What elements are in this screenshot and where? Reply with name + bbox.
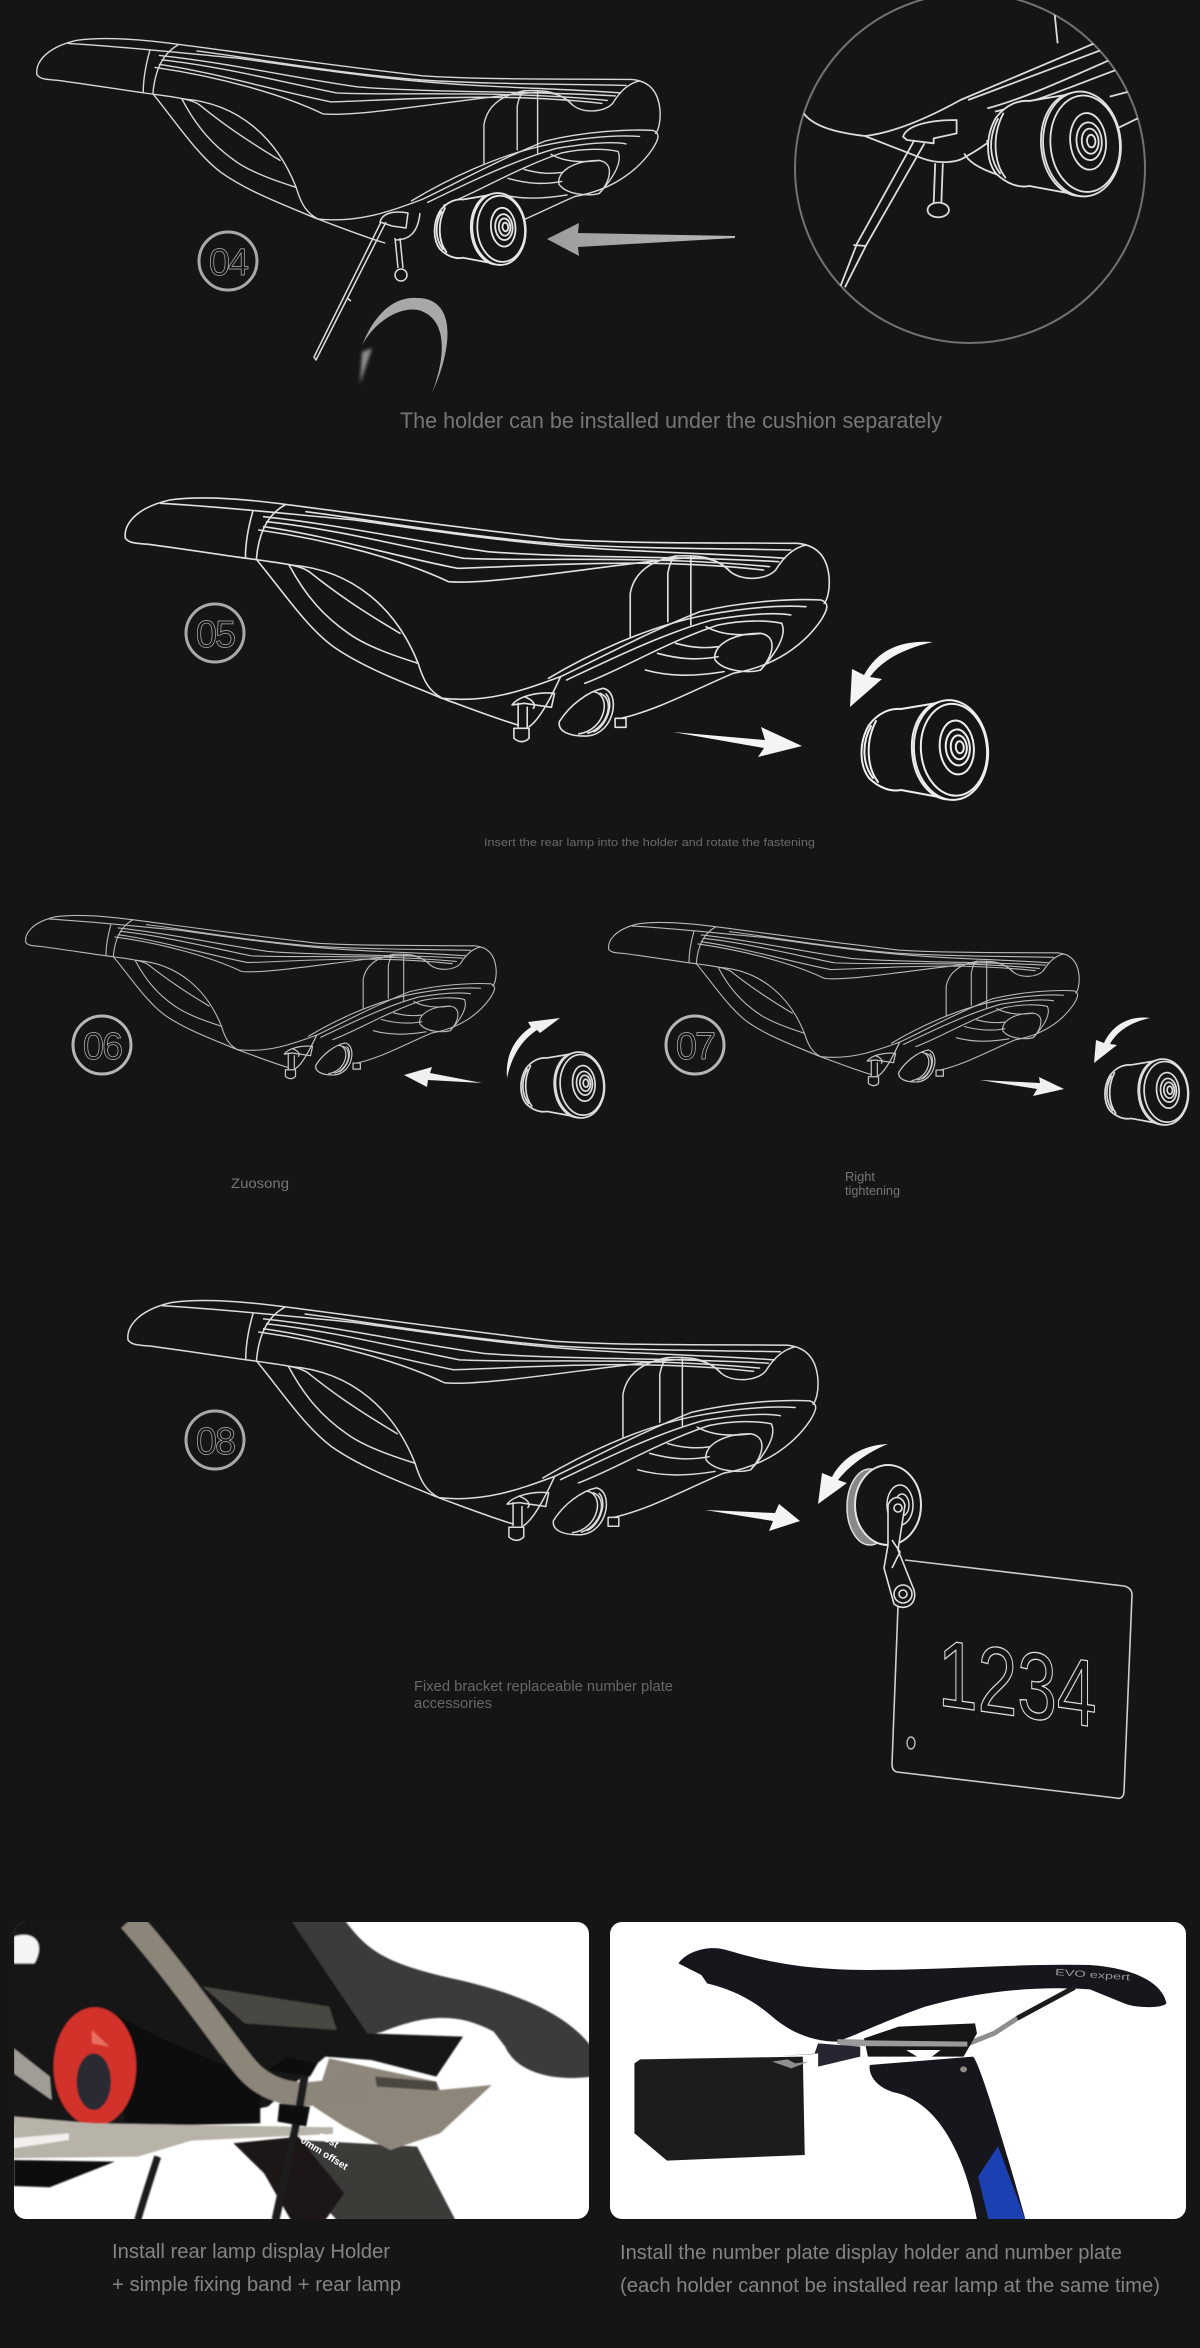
step number 07: 07 [676, 1026, 715, 1068]
panel: step 04 [37, 0, 1148, 433]
caption: number plate photo [620, 2242, 1160, 2297]
caption 08: accessories [414, 1695, 492, 1712]
arrow: straight 07 [980, 1077, 1064, 1096]
zip tie [276, 2067, 306, 2220]
metal holder [314, 2058, 492, 2150]
arrow: straight 06 [404, 1067, 482, 1087]
cable [138, 2157, 158, 2220]
arrow tail fragment [360, 348, 372, 384]
seat rail [837, 2018, 1017, 2044]
saddle drawing 07 [609, 922, 1079, 1075]
caption 07: Right [845, 1169, 875, 1184]
step number 04 [199, 232, 257, 290]
caption 08: Fixed bracket replaceable number plate [414, 1678, 673, 1695]
arrow: gray straight [547, 223, 735, 256]
step number 06: 06 [83, 1026, 122, 1068]
dark frame area [11, 1920, 463, 2130]
arrow: gray curved [362, 298, 448, 393]
seatpost print: post [316, 2130, 341, 2151]
white gap [14, 1935, 39, 1963]
saddle drawing 06 [26, 915, 496, 1068]
step number 08: 08 [196, 1421, 235, 1463]
red lamp ring [54, 2007, 136, 2126]
caption 05: Insert the rear lamp into the holder and rotate the fastening [484, 837, 815, 849]
saddle underside [276, 1920, 591, 2078]
photo: rear lamp installed [11, 1920, 591, 2220]
lamp 08 [847, 1465, 921, 1545]
caption: rear lamp photo: Install rear lamp display Holder [112, 2241, 390, 2263]
post bolt [960, 2066, 967, 2072]
saddle mount 08 [507, 1476, 619, 1540]
saddle mount 06 [284, 1035, 360, 1079]
step number 05 [186, 604, 244, 662]
arrow: curved 06 [507, 1018, 560, 1078]
caption: rear lamp photo: + simple fixing band + rear lamp [112, 2274, 401, 2296]
step number 05: 05 [196, 614, 235, 656]
panel: step 06 [26, 915, 607, 1191]
saddle drawing 04 [37, 39, 660, 243]
saddle mount 07 [867, 1042, 943, 1086]
arrow: straight 08 [705, 1504, 800, 1531]
caption: rear lamp photo [112, 2241, 401, 2296]
callout: magnified holder [795, 0, 1148, 343]
number plate [892, 1560, 1132, 1798]
lamp 05 [862, 697, 992, 803]
lower body of seatpost [291, 2140, 455, 2220]
panel: step 08 [128, 1301, 1132, 1798]
plate connector [780, 2043, 860, 2067]
black lamp body [118, 2016, 262, 2126]
caption: number plate photo: Install the number plate display holder and number plate [620, 2242, 1122, 2264]
silver bar [14, 2117, 333, 2158]
seatpost [870, 2057, 1026, 2220]
saddle drawing 08 [128, 1301, 818, 1524]
blue stripe [978, 2146, 1026, 2220]
caption 06: Zuosong [231, 1175, 289, 1191]
number plate: 1234 [938, 1619, 1096, 1748]
panel: step 07 [609, 922, 1191, 1198]
lamp 06 [521, 1050, 607, 1120]
bike saddle [678, 1948, 1166, 2042]
caption 04: The holder can be installed under the cushion separately [400, 408, 942, 433]
arrow: curved 08 [818, 1444, 888, 1504]
seatpost print: 0mm offset [298, 2135, 350, 2173]
bracket 08 [884, 1498, 915, 1607]
caption: number plate photo: (each holder cannot be installed rear lamp at the same time) [620, 2275, 1160, 2297]
lamp 04 [435, 191, 529, 267]
caption 07 [845, 1169, 900, 1198]
number plate photo [634, 2057, 805, 2161]
caption 08 [414, 1678, 673, 1712]
caption 07: tightening [845, 1183, 900, 1198]
lamp 07 [1105, 1057, 1191, 1127]
arrow: curved 05 [850, 642, 933, 707]
step number 08 [186, 1411, 244, 1469]
saddle drawing 05 [125, 498, 829, 725]
lamp button [77, 2053, 111, 2110]
saddle mount 05 [512, 677, 626, 742]
cross tube [203, 1987, 337, 2030]
arrow: curved 07 [1094, 1017, 1150, 1063]
saddle logo: EVO expert [1055, 1967, 1131, 1982]
photo: number plate installed [610, 1922, 1186, 2220]
black lower blob [14, 2160, 115, 2187]
saddle clamp [864, 2023, 977, 2057]
panel: step 05 [125, 498, 992, 849]
step number 06 [73, 1016, 131, 1074]
step number 04: 04 [209, 242, 249, 284]
arrow: straight 05 [673, 727, 802, 757]
holder and strap 04 [314, 212, 420, 360]
wing nut [772, 2059, 809, 2068]
step number 07 [666, 1016, 724, 1074]
seat rail [130, 1920, 367, 2094]
